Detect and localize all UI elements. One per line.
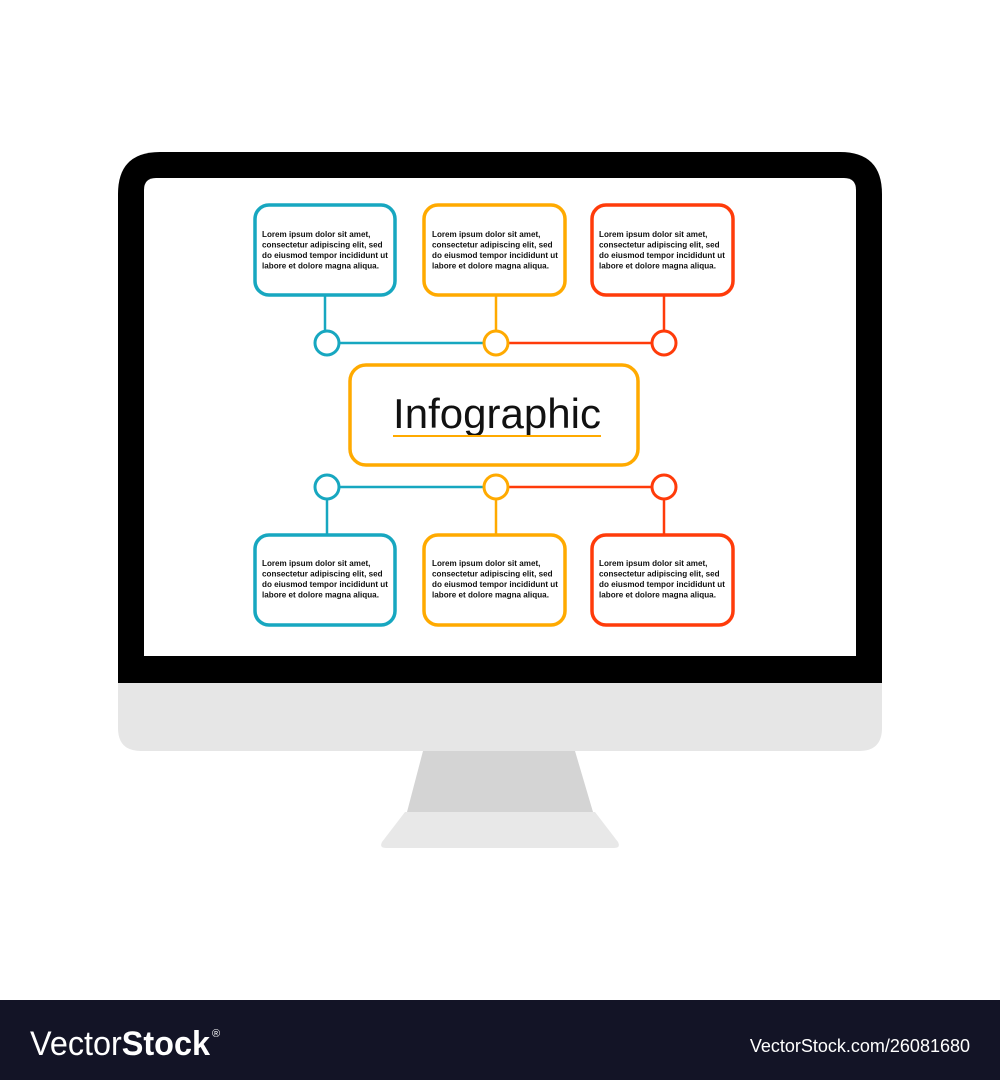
center title box [350, 365, 638, 465]
box: bottom red: labore et dolore magna aliqua. [599, 590, 716, 600]
box: top orange: do eiusmod tempor incididunt ut [432, 251, 558, 260]
box: bottom teal [255, 535, 395, 625]
box: top red: do eiusmod tempor incididunt ut [599, 251, 725, 260]
footer bar: VectorStock [30, 1025, 210, 1063]
box: bottom orange: labore et dolore magna aliqua. [432, 590, 549, 600]
box: top orange [424, 205, 565, 295]
box: top red: labore et dolore magna aliqua. [599, 262, 716, 270]
box: top red: Lorem ipsum dolor sit amet, [599, 230, 707, 239]
box: bottom teal: consectetur adipiscing elit, sed [262, 570, 383, 578]
monitor chin [118, 660, 882, 751]
box: top red [592, 205, 733, 295]
monitor bezel [118, 152, 882, 683]
box: top teal: do eiusmod tempor incididunt ut [262, 251, 388, 260]
stand base [381, 812, 619, 848]
monitor [118, 152, 882, 848]
footer bar: ® [212, 1028, 220, 1040]
screen [144, 178, 856, 656]
box: top orange: consectetur adipiscing elit, sed [432, 240, 553, 250]
box: bottom teal: labore et dolore magna aliqua. [262, 590, 379, 600]
box: bottom red [592, 535, 733, 625]
box: bottom orange [424, 535, 565, 625]
box: top orange: labore et dolore magna aliqua. [432, 262, 549, 270]
box: top teal: labore et dolore magna aliqua. [262, 262, 379, 270]
box: bottom red: consectetur adipiscing elit, sed [599, 570, 720, 578]
box: top teal [255, 205, 395, 295]
box: top teal: Lorem ipsum dolor sit amet, [262, 230, 370, 239]
stand neck [407, 751, 593, 812]
box: bottom orange: do eiusmod tempor incididunt ut [432, 580, 558, 589]
box: top orange: Lorem ipsum dolor sit amet, [432, 230, 540, 239]
footer bar [0, 1000, 1000, 1080]
box: bottom red: do eiusmod tempor incididunt ut [599, 580, 725, 589]
box: bottom red: Lorem ipsum dolor sit amet, [599, 559, 707, 568]
center title box: Infographic [393, 390, 601, 437]
box: bottom teal: do eiusmod tempor incididunt ut [262, 580, 388, 589]
connectors top [315, 296, 676, 355]
box: top teal: consectetur adipiscing elit, sed [262, 240, 383, 250]
connectors bottom [315, 475, 676, 534]
box: top red: consectetur adipiscing elit, sed [599, 240, 720, 250]
box: bottom teal: Lorem ipsum dolor sit amet, [262, 559, 370, 568]
footer bar: VectorStock.com/26081680 [750, 1036, 970, 1056]
box: bottom orange: Lorem ipsum dolor sit amet, [432, 559, 540, 568]
box: bottom orange: consectetur adipiscing elit, sed [432, 570, 553, 578]
